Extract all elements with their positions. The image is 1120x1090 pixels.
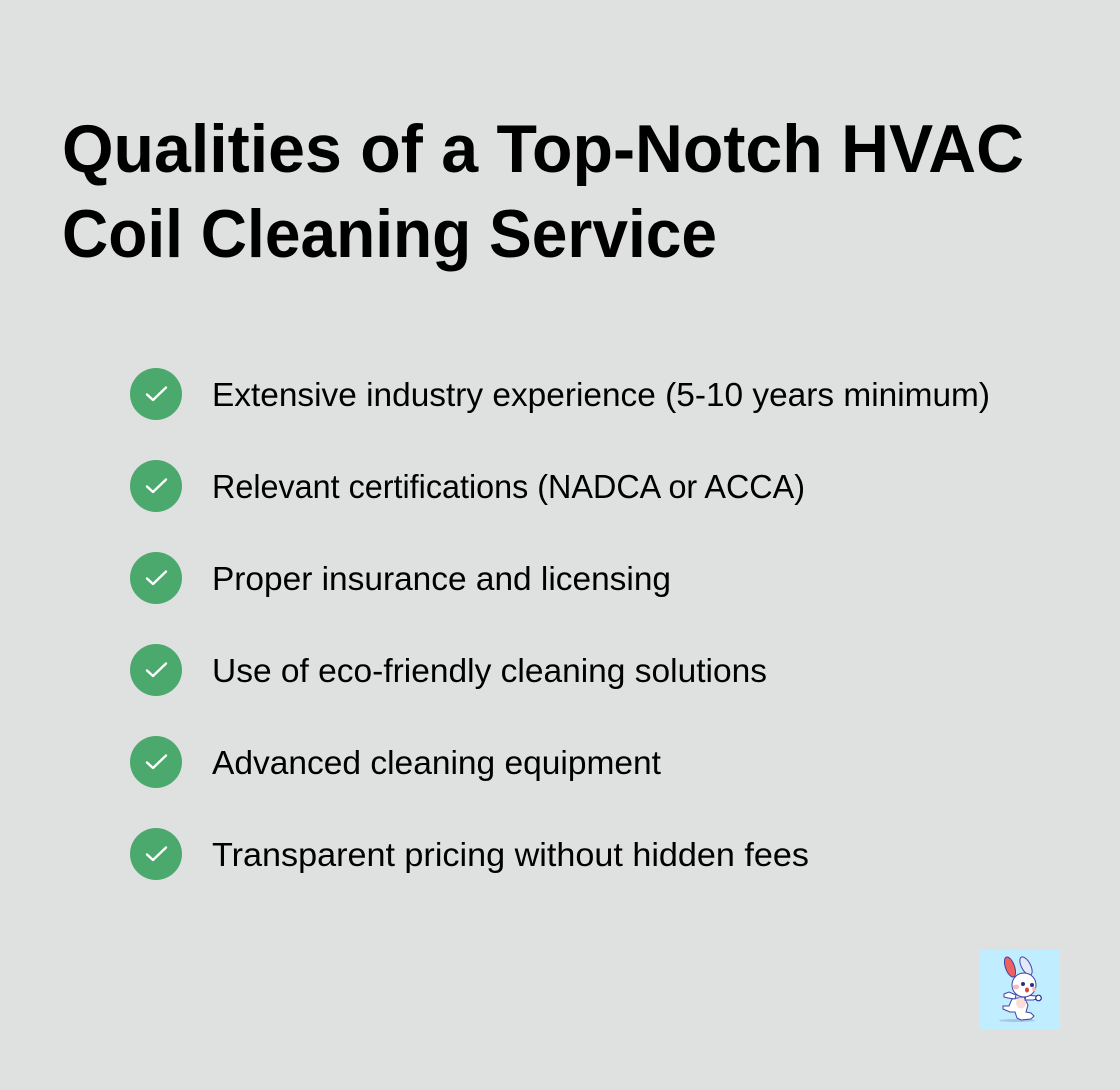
title: [62, 111, 1024, 272]
title: Qualities of a Top-Notch HVAC: [62, 111, 1024, 187]
item: certifications: Relevant certifications (NADCA or ACCA): [212, 468, 805, 505]
item: advanced equipment: Advanced cleaning equipment: [212, 744, 661, 781]
item: insurance and licensing: [130, 552, 671, 604]
item: industry experience: Extensive industry experience (5-10 years minimum): [212, 376, 990, 413]
item: eco-friendly solutions: Use of eco-friendly cleaning solutions: [212, 652, 767, 689]
checklist: [130, 368, 990, 880]
item: certifications: [130, 460, 805, 512]
item: insurance and licensing: Proper insurance and licensing: [212, 560, 671, 597]
item: transparent pricing: Transparent pricing without hidden fees: [212, 836, 809, 873]
title: Coil Cleaning Service: [62, 196, 717, 272]
item: transparent pricing: [130, 828, 809, 880]
item: industry experience: [130, 368, 990, 420]
item: eco-friendly solutions: [130, 644, 767, 696]
icon: rabbit logo: [980, 950, 1060, 1030]
item: advanced equipment: [130, 736, 661, 788]
